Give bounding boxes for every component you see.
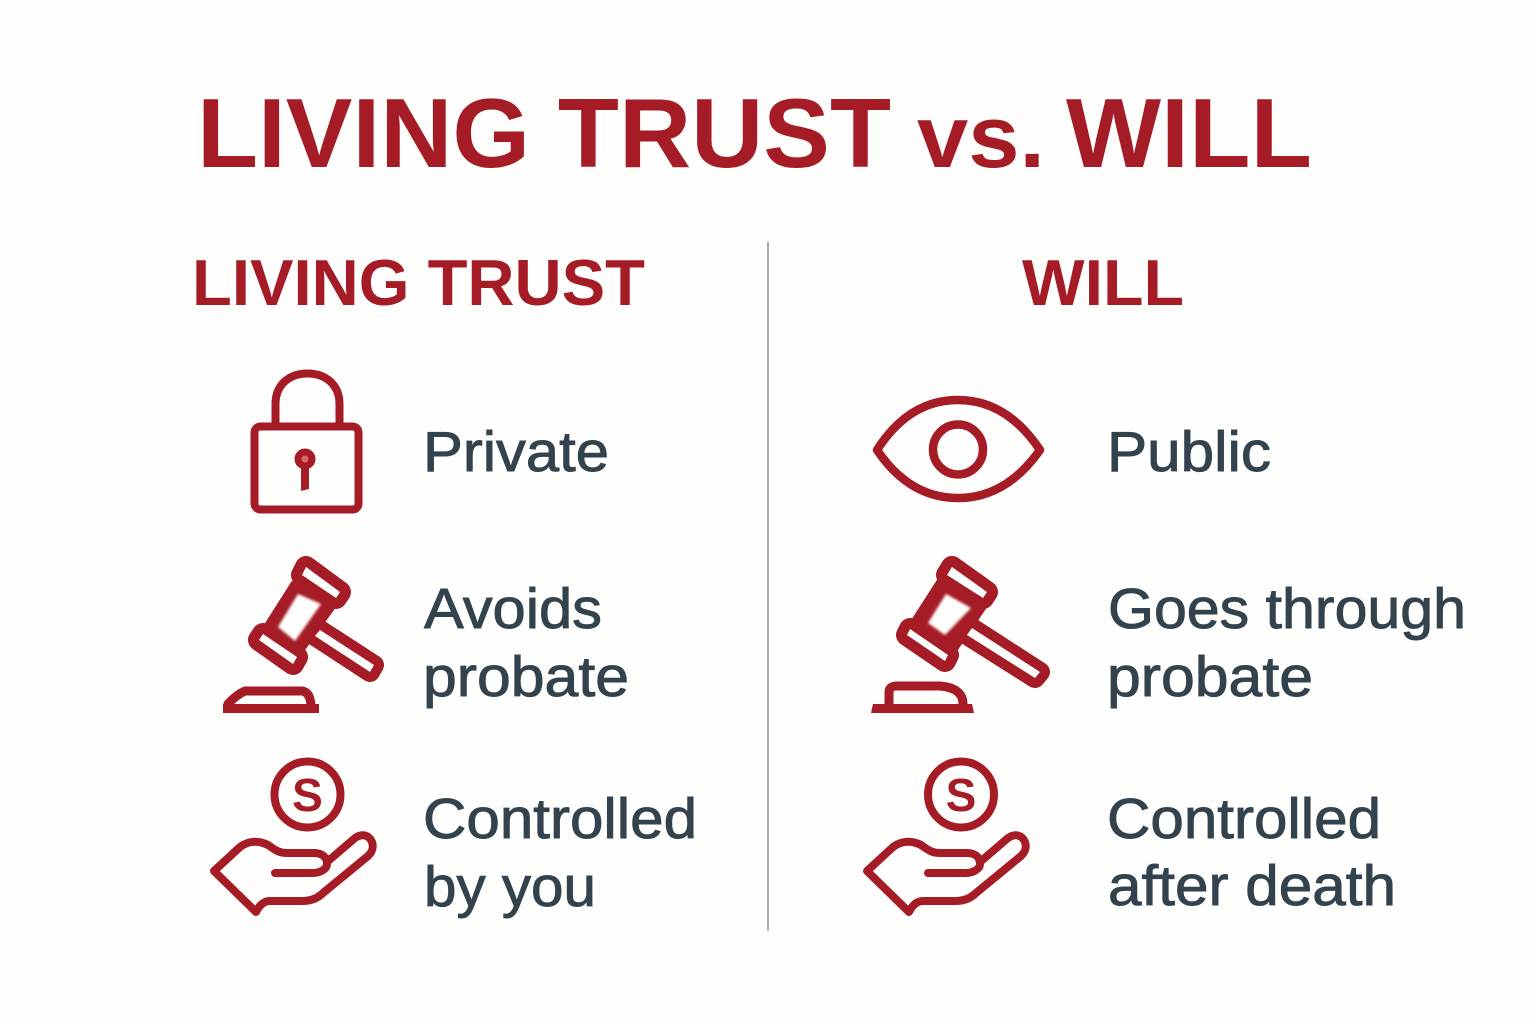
- icon: gavel: [223, 567, 374, 713]
- label: avoids probate: Avoids: [424, 577, 602, 641]
- panel: will: [867, 246, 1466, 918]
- label: avoids probate: probate: [423, 645, 629, 709]
- icon: coin over open hand: [214, 762, 373, 912]
- icon: coin over open hand: S: [946, 769, 976, 821]
- label: avoids probate: [423, 577, 629, 709]
- label: controlled after death: [1107, 787, 1396, 918]
- panel: living trust: [192, 246, 697, 919]
- label: controlled by you: [423, 787, 697, 919]
- title: [197, 78, 1312, 188]
- heading: will: WILL: [1022, 246, 1184, 319]
- label: public: Public: [1107, 420, 1271, 484]
- label: controlled by you: Controlled: [423, 787, 697, 851]
- label: goes through probate: probate: [1107, 645, 1313, 709]
- label: controlled by you: by you: [424, 855, 596, 919]
- heading: living trust: LIVING TRUST: [192, 246, 645, 319]
- title: LIVING TRUST: [197, 78, 891, 188]
- icon: coin over open hand: [867, 762, 1026, 912]
- icon: eye: [877, 400, 1040, 498]
- label: controlled after death: after death: [1108, 854, 1396, 918]
- icon: gavel: [871, 567, 1040, 713]
- label: goes through probate: Goes through: [1108, 577, 1466, 641]
- label: goes through probate: [1107, 577, 1466, 709]
- title: vs.: [917, 87, 1045, 186]
- icon: padlock: [254, 374, 358, 510]
- label: controlled after death: Controlled: [1107, 787, 1381, 851]
- title: WILL: [1066, 78, 1312, 188]
- label: private: Private: [423, 420, 609, 484]
- icon: coin over open hand: S: [292, 769, 323, 821]
